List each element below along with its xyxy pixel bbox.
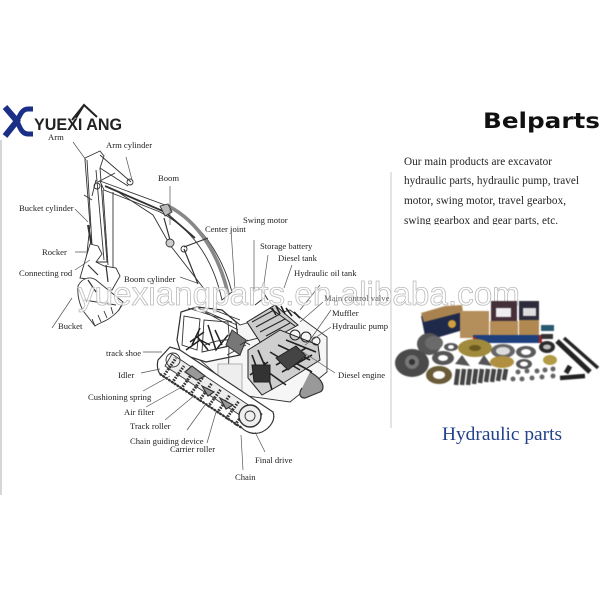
diagram labels: Storage battery (260, 241, 313, 251)
diagram labels: track shoe (106, 348, 141, 358)
diagram labels: Rocker (42, 247, 67, 257)
pistons and small parts (456, 366, 556, 385)
intro text block: hydraulic parts, hydraulic pump, travel (404, 175, 579, 187)
diagram labels: Main control valve (324, 293, 390, 303)
caption: Hydraulic parts: Hydraulic parts (442, 424, 562, 445)
diagram labels: Diesel engine (338, 370, 385, 380)
hydraulic cylinder block (395, 325, 554, 377)
black shafts (557, 338, 598, 378)
intro text block: Our main products are excavator (404, 156, 552, 168)
logo: Yuexiang (5, 105, 122, 136)
plates and gears (426, 339, 557, 384)
diagram labels: Track roller (130, 421, 171, 431)
diagram labels: Final drive (255, 455, 293, 465)
diagram labels: Bucket (58, 321, 83, 331)
intro text block: motor, swing motor, travel gearbox, (404, 195, 566, 207)
leader lines (52, 142, 335, 470)
diagram labels: Hydraulic oil tank (294, 268, 357, 278)
diagram labels: Chain (235, 472, 256, 482)
intro text block (404, 156, 579, 227)
cartons (421, 301, 539, 341)
hydraulic parts photo (395, 301, 598, 385)
diagram labels: Swing motor (243, 215, 288, 225)
logo: Belparts: Belparts (483, 109, 600, 133)
excavator diagram (52, 142, 335, 470)
logo: Yuexiang: YUEXI ANG (34, 116, 122, 134)
diagram labels: Idler (118, 370, 134, 380)
diagram labels: Muffler (332, 308, 359, 318)
diagram labels (19, 132, 390, 482)
diagram labels: Carrier roller (170, 444, 215, 454)
track assembly (157, 347, 274, 433)
upper structure (177, 307, 327, 402)
diagram labels: Chain guiding device (130, 436, 204, 446)
diagram labels: Hydraulic pump (332, 321, 388, 331)
excavator arm (84, 151, 133, 262)
diagram labels: Boom (158, 173, 179, 183)
diagram labels: Diesel tank (278, 253, 318, 263)
diagram labels: Bucket cylinder (19, 203, 74, 213)
excavator boom (100, 181, 232, 300)
diagram labels: Connecting rod (19, 268, 73, 278)
diagram labels: Boom cylinder (124, 274, 175, 284)
diagram labels: Air filter (124, 407, 154, 417)
bucket (78, 244, 123, 326)
engine and hydraulic components (226, 290, 320, 395)
diagram labels: Arm cylinder (106, 140, 152, 150)
watermark: yuexiangparts.en.alibaba.com (78, 275, 520, 312)
intro text block: swing gearbox and gear parts, etc. (404, 215, 558, 227)
diagram labels: Arm (48, 132, 64, 142)
diagram labels: Cushioning spring (88, 392, 152, 402)
diagram labels: Center joint (205, 224, 246, 234)
